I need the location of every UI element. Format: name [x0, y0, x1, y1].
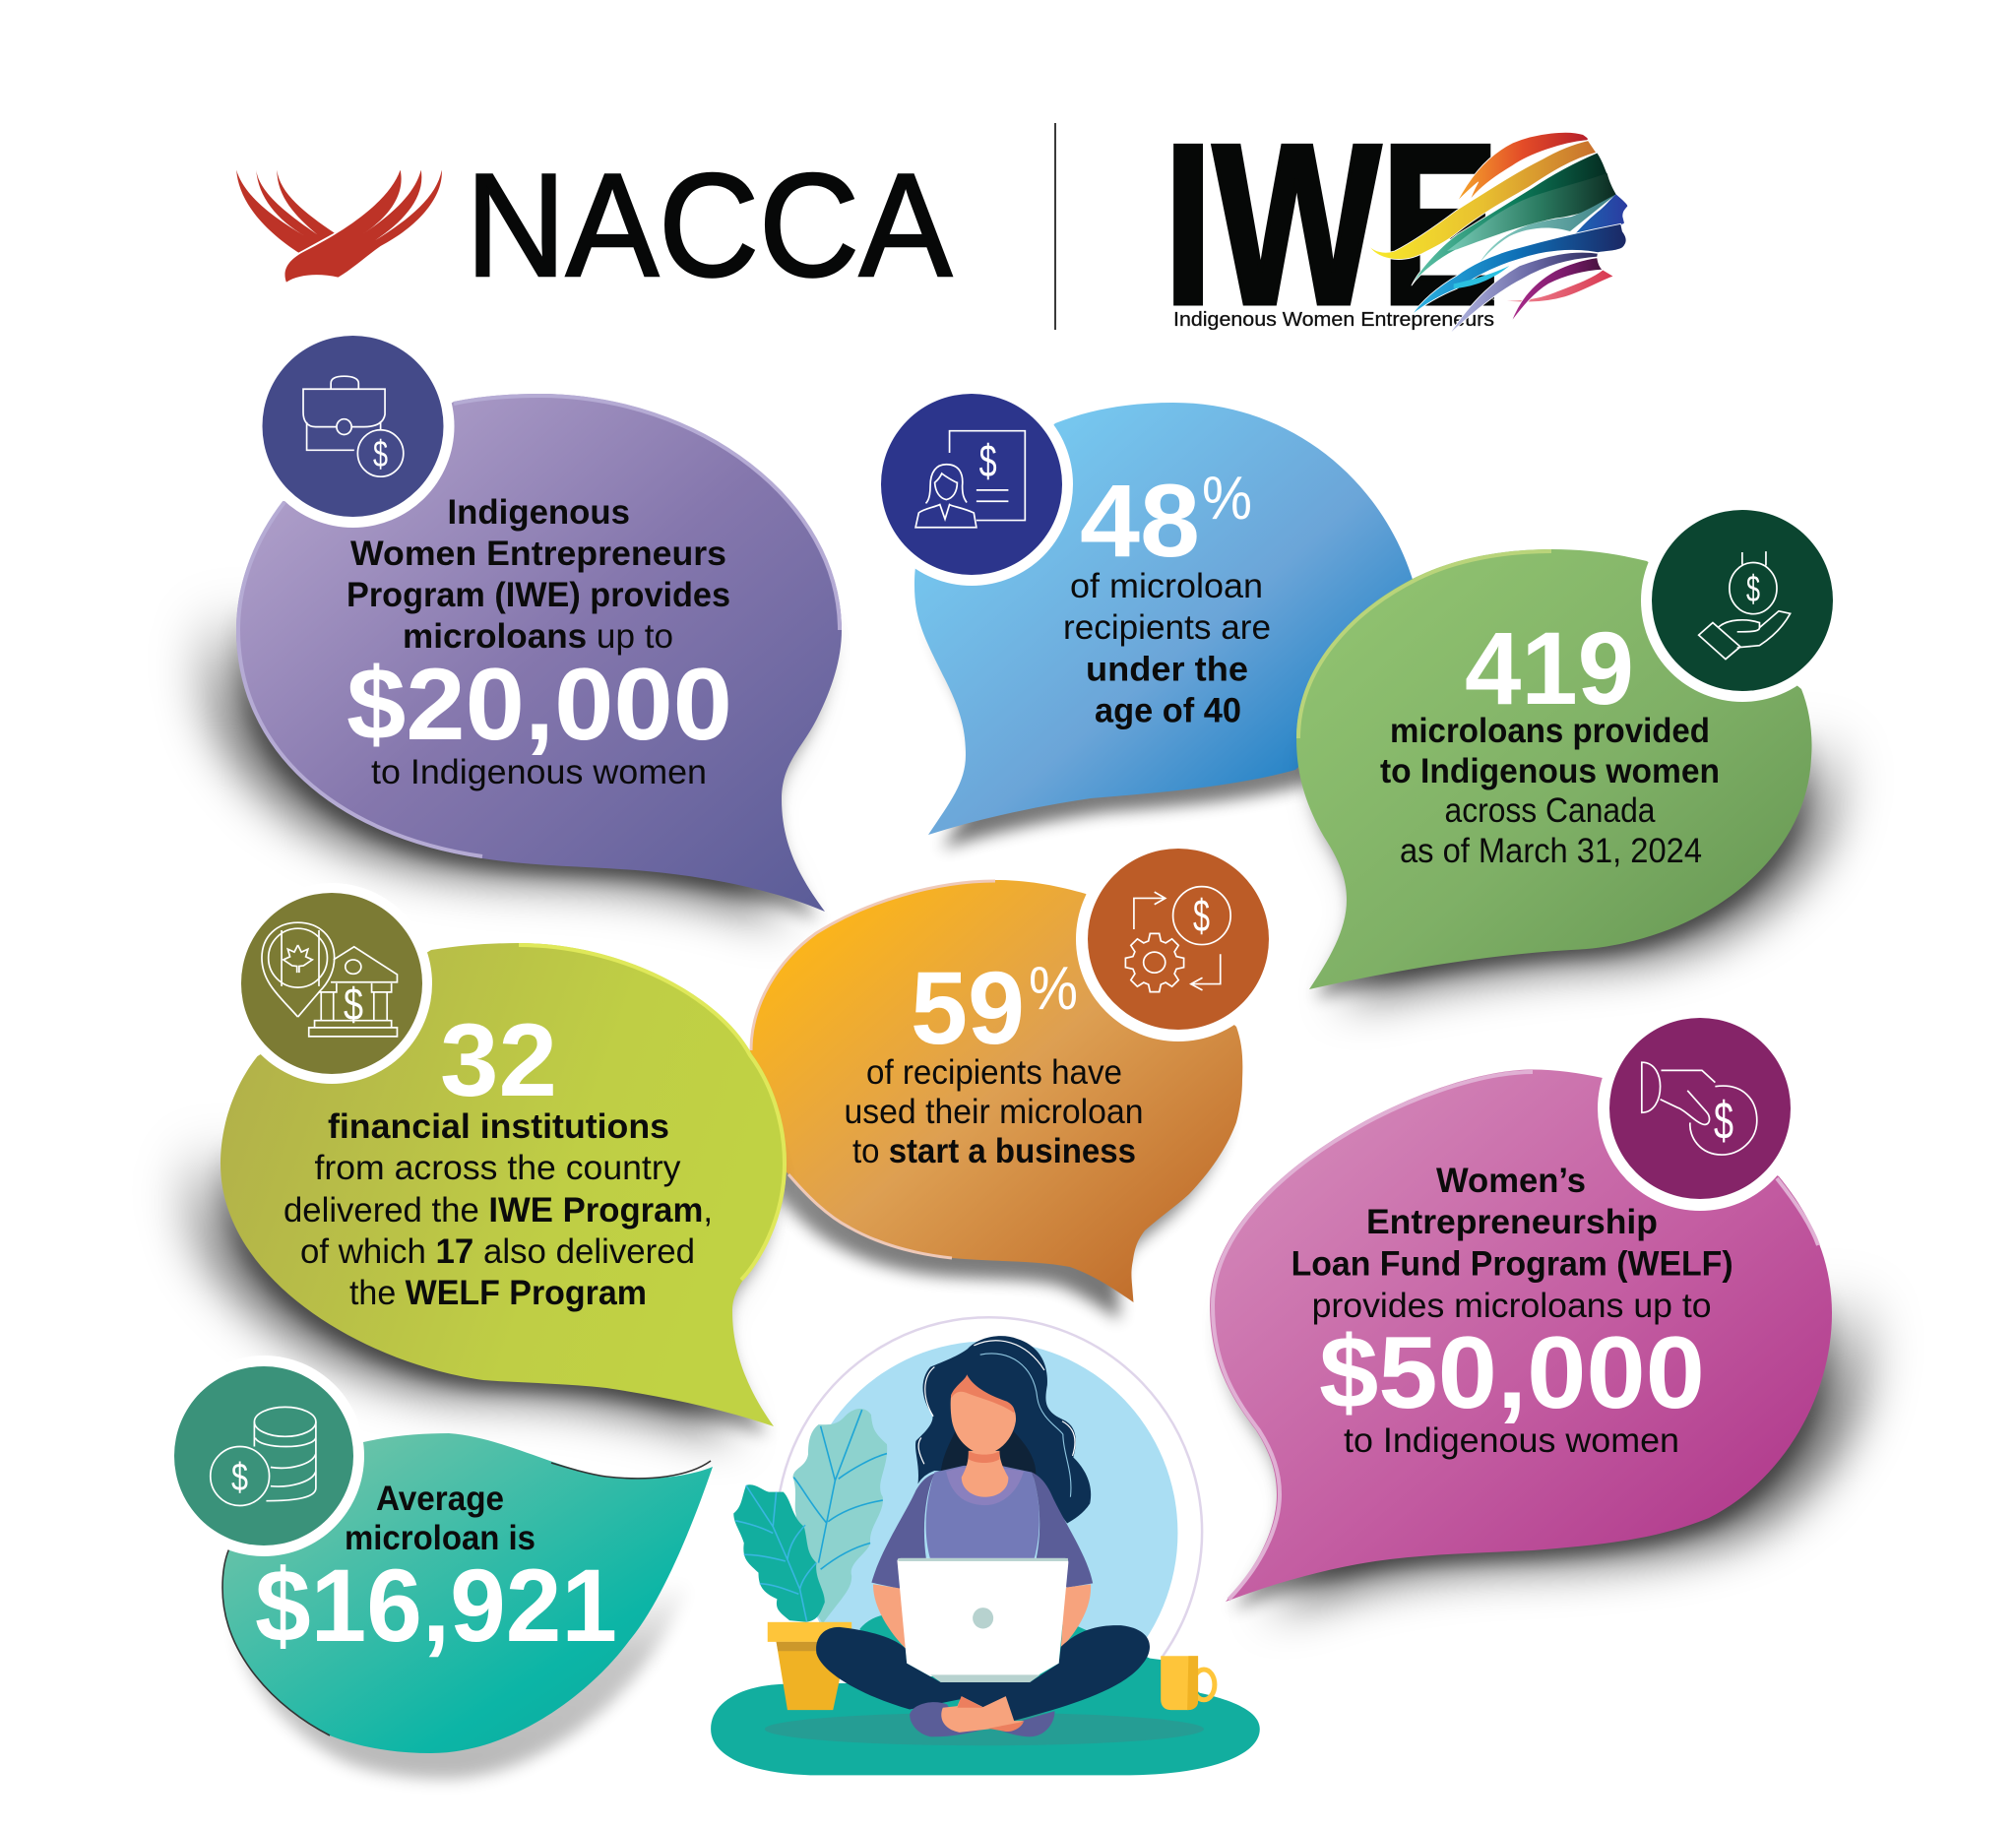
mat shadow [765, 1713, 1204, 1745]
panel: 419 microloans: across Canada [1445, 791, 1656, 830]
pink speech bubble [1210, 1069, 1832, 1602]
panel: 48 percent under 40: % [1202, 465, 1252, 533]
icon: hand and coin: $ [1746, 569, 1760, 610]
panel: IWE program microloans: Program (IWE) provides [346, 576, 730, 614]
orange speech bubble [750, 880, 1242, 1302]
panel: 419 microloans: as of March 31, 2024 [1400, 832, 1702, 870]
blue speech bubble [914, 403, 1420, 835]
panel: IWE program microloans: to Indigenous women [371, 753, 707, 791]
big number: $16,921 [255, 1548, 617, 1664]
panel: 48 percent under 40: under the [1086, 650, 1248, 689]
outer ring [778, 1317, 1202, 1657]
floor mat [711, 1613, 1260, 1775]
icon: pin with flag and bank [231, 883, 432, 1084]
olive speech bubble [220, 943, 787, 1426]
neck [962, 1451, 1008, 1497]
description: financial institutions [328, 1107, 669, 1146]
icon: woman with document: $ [979, 435, 997, 486]
hands [941, 1696, 1025, 1733]
big number: $20,000 [346, 648, 732, 762]
illustration: woman with laptop [711, 1317, 1260, 1775]
heading text: Indigenous [447, 493, 630, 532]
panel: WELF program: to Indigenous women [1344, 1421, 1679, 1460]
icon: gear, coin and arrows: $ [1193, 890, 1210, 941]
panel: IWE program microloans: Women Entrepreneurs [350, 535, 726, 573]
panel: WELF program [1210, 1006, 1875, 1613]
icon: hand with coin: $ [1714, 1092, 1733, 1151]
description: of microloan [1070, 567, 1263, 605]
icon: hand and coin [1641, 499, 1844, 702]
panel: 32 financial institutions: of which 17 also delivered [300, 1232, 695, 1271]
panel: 32 financial institutions [181, 883, 787, 1438]
panel: 48 percent under 40: recipients are [1063, 608, 1271, 647]
panel: 419 microloans [1296, 499, 1846, 1001]
coffee mug [1161, 1656, 1215, 1710]
green speech bubble [1296, 549, 1812, 989]
IWE wordmark: IWE [1164, 97, 1499, 352]
panel: average microloan: microloan is [345, 1519, 536, 1557]
icon: rainbow feather head [1368, 132, 1627, 335]
icon: coin stack: $ [231, 1456, 248, 1499]
heading text: Women’s [1436, 1162, 1586, 1200]
description: microloans provided [1390, 712, 1710, 750]
big number: 32 [440, 1003, 557, 1118]
big number: 48 [1080, 464, 1200, 579]
big number: $50,000 [1319, 1316, 1705, 1430]
panel: 419 microloans: to Indigenous women [1380, 752, 1720, 790]
panel: 59 percent start a business: used their microloan [845, 1093, 1144, 1131]
panel: 59 percent start a business [736, 837, 1281, 1320]
shoes [910, 1702, 1054, 1736]
divider line [1054, 123, 1056, 330]
icon: briefcase and coin: $ [373, 434, 388, 475]
description: Average [376, 1480, 504, 1518]
icon: pin with flag and bank: $ [344, 978, 363, 1030]
IWE tagline: Indigenous Women Entrepreneurs [1173, 309, 1494, 331]
icon: hand with coin [1598, 1006, 1802, 1211]
panel: 32 financial institutions: from across the country [315, 1149, 681, 1187]
hair [915, 1336, 1091, 1523]
panel: IWE program microloans: microloans up to [403, 617, 673, 656]
icon: gear, coin and arrows [1076, 837, 1281, 1041]
panel: IWE program microloans [197, 325, 842, 923]
laptop [897, 1558, 1068, 1682]
big number: 59 [911, 951, 1025, 1066]
icon: woman with document [870, 383, 1073, 586]
panel: 48 percent under 40: age of 40 [1095, 691, 1241, 730]
panel: 48 percent under 40 [870, 383, 1434, 849]
teal speech bubble [222, 1433, 713, 1753]
description: of recipients have [866, 1053, 1122, 1092]
icon: NACCA red wings [236, 170, 442, 283]
plant pot [768, 1622, 851, 1710]
arms [873, 1584, 1091, 1649]
panel: average microloan [163, 1356, 726, 1779]
icon: coin stack [163, 1356, 364, 1556]
panel: WELF program: Loan Fund Program (WELF) [1292, 1244, 1733, 1284]
shirt [871, 1466, 1093, 1589]
plant [733, 1409, 887, 1623]
logo: IWE [1164, 97, 1627, 352]
legs [816, 1625, 1150, 1721]
NACCA wordmark: NACCA [466, 143, 953, 307]
panel: 59 percent start a business: to start a business [852, 1132, 1136, 1170]
panel: WELF program: provides microloans up to [1312, 1287, 1712, 1325]
panel: 59 percent start a business: % [1029, 955, 1078, 1023]
panel: 32 financial institutions: delivered the IWE Program, [284, 1191, 713, 1230]
panel: WELF program: Entrepreneurship [1366, 1203, 1658, 1241]
light blue circle [797, 1341, 1177, 1725]
big number: 419 [1465, 611, 1634, 726]
purple speech bubble [236, 394, 842, 912]
panel: 32 financial institutions: the WELF Program [349, 1274, 647, 1312]
icon: briefcase and coin [252, 325, 455, 528]
face [951, 1374, 1016, 1454]
logo: NACCA [236, 143, 953, 307]
